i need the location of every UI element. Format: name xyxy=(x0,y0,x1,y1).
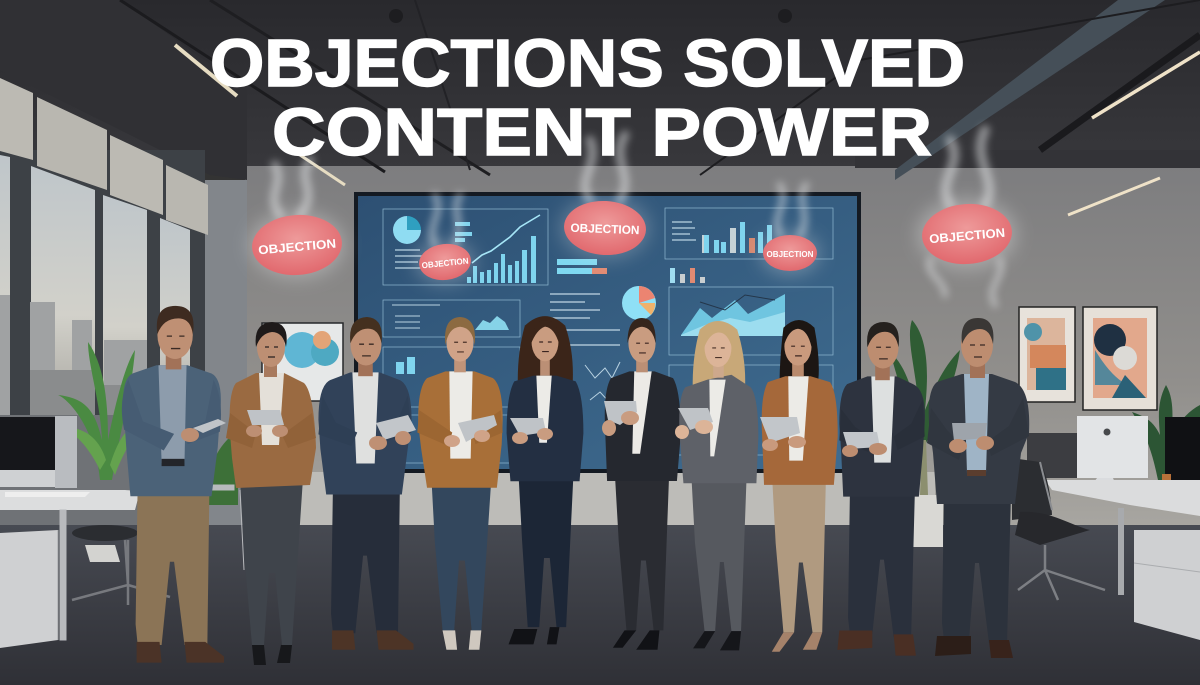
small area panel xyxy=(383,300,520,337)
tablet xyxy=(843,432,880,449)
person 1 xyxy=(122,306,226,663)
plant right xyxy=(1132,385,1200,480)
horizontal bars xyxy=(557,259,607,274)
objection bubble 5: OBJECTION xyxy=(929,226,1006,246)
tablet xyxy=(376,415,416,440)
paintings right xyxy=(1019,307,1157,410)
person 2 xyxy=(226,322,316,665)
pie chart xyxy=(622,286,656,320)
person 5 xyxy=(507,316,583,644)
objection bubble 4 xyxy=(760,231,820,275)
person 8 xyxy=(760,320,838,652)
tablet xyxy=(678,408,713,430)
chart panel: rising bars xyxy=(383,209,548,285)
person 7 xyxy=(675,321,758,650)
small bars xyxy=(670,268,705,283)
objection bubble 1 xyxy=(249,211,345,279)
wall painting left xyxy=(262,323,343,401)
objection bubble 4: OBJECTION xyxy=(766,249,814,259)
title: OBJECTIONS SOLVED xyxy=(210,26,965,101)
tablet xyxy=(952,423,987,441)
objection bubble 5 xyxy=(917,198,1017,270)
objection bubble 2: OBJECTION xyxy=(421,256,469,270)
person 9 xyxy=(837,322,925,656)
person 6 xyxy=(602,318,681,650)
title xyxy=(210,26,965,170)
tablet xyxy=(604,401,637,425)
right desk with computer and chair xyxy=(1012,416,1200,640)
area chart panel xyxy=(669,287,833,355)
objection bubble 1: OBJECTION xyxy=(258,237,337,257)
tablet xyxy=(193,419,226,433)
tablet xyxy=(510,418,546,436)
objection bubble 2 xyxy=(415,240,475,284)
objection bubble 3: OBJECTION xyxy=(570,221,640,237)
plant behind right xyxy=(890,320,960,547)
chart panel: top right bars xyxy=(665,208,833,259)
person 10 xyxy=(927,318,1029,658)
plant left xyxy=(58,342,238,505)
left windows and blinds xyxy=(0,78,208,525)
display screen with charts xyxy=(354,192,861,473)
ceiling rails and lights xyxy=(120,0,1200,215)
title: CONTENT POWER xyxy=(272,95,932,170)
smoke wisps xyxy=(274,130,1001,305)
person 3 xyxy=(318,317,416,650)
objection bubble 3 xyxy=(560,196,650,260)
tablet xyxy=(458,415,497,442)
tablet xyxy=(760,417,800,443)
left desk with monitor xyxy=(0,416,244,648)
person 4 xyxy=(417,317,503,650)
lower panels xyxy=(383,294,833,463)
tablet xyxy=(247,410,284,425)
